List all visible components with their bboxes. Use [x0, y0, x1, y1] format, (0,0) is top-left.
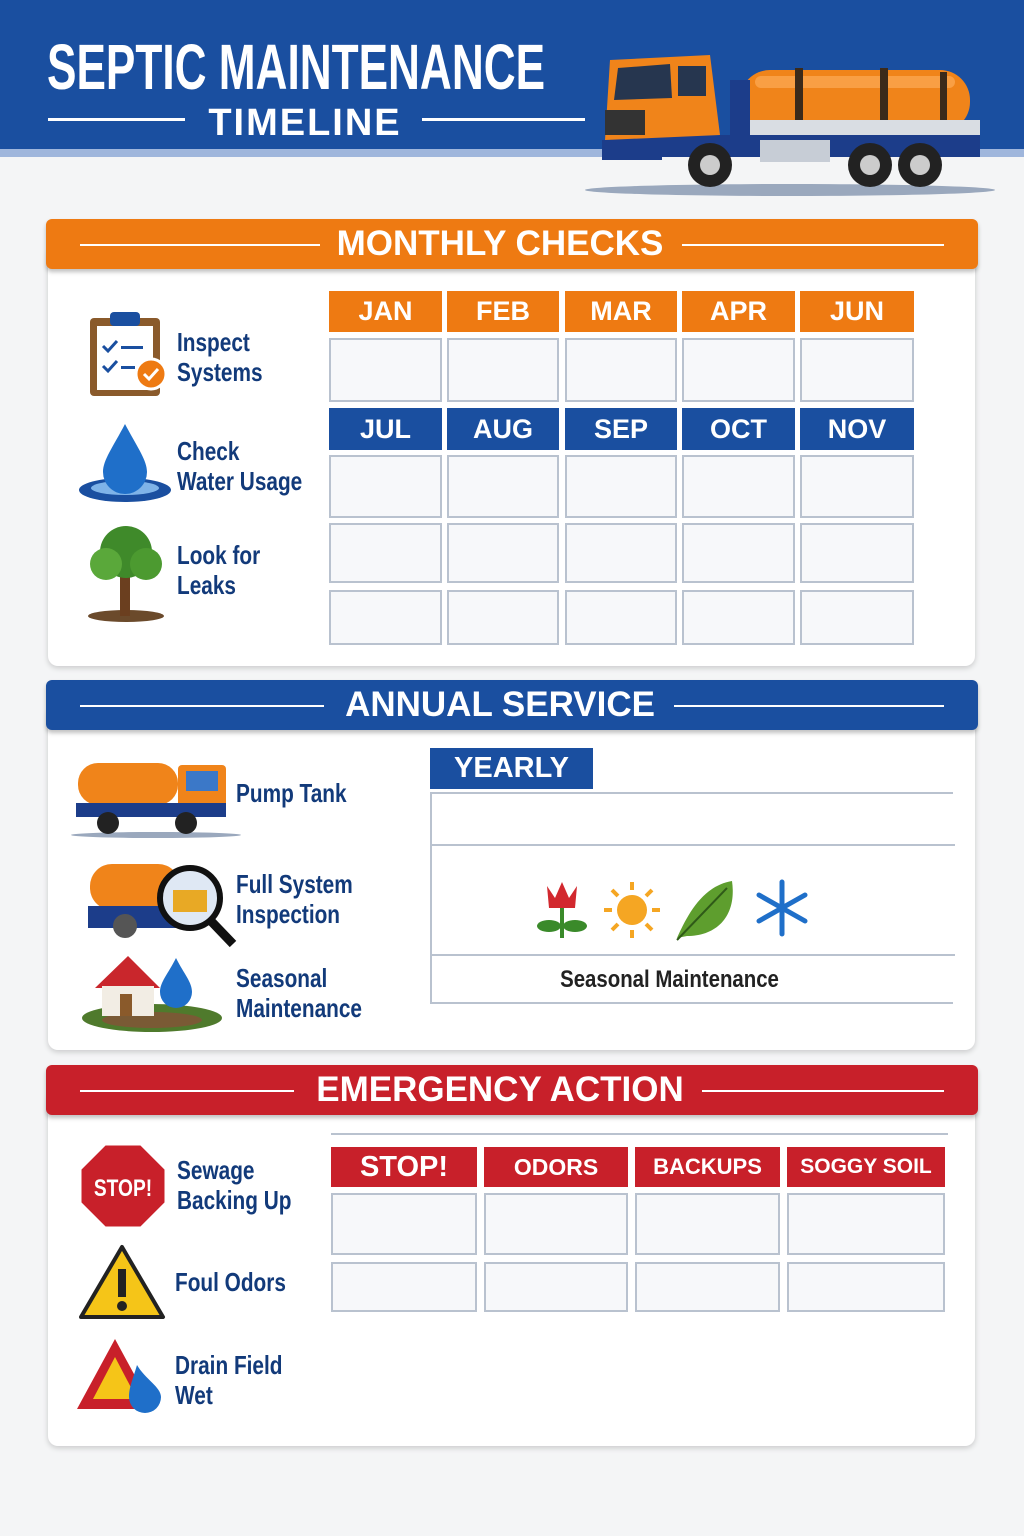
title: SEPTIC MAINTENANCE: [47, 31, 545, 103]
heading: annual service: ANNUAL SERVICE: [345, 685, 655, 724]
icon: pump truck: [71, 763, 241, 838]
title: TIMELINE: [208, 102, 402, 144]
monthly grid: JUN: [830, 296, 884, 326]
icon: water drop: [79, 424, 171, 502]
monthly grid: JUL: [360, 414, 411, 444]
icon: stop sign: STOP!: [94, 1174, 152, 1202]
icon: warning triangle: [79, 1244, 166, 1319]
heading: monthly checks: [46, 219, 978, 269]
label: seasonal maintenance: Seasonal: [236, 963, 327, 993]
icon: drain field warning: [77, 1339, 161, 1413]
label: full system inspection: Full System: [236, 869, 353, 899]
emergency grid: BACKUPS: [653, 1154, 762, 1179]
monthly grid: OCT: [710, 414, 767, 444]
icon: inspection magnifier: [88, 864, 236, 948]
label: sewage backing up: [177, 1155, 291, 1215]
monthly grid: JAN: [358, 296, 412, 326]
panel: monthly checks: [48, 245, 975, 666]
title: [47, 31, 585, 144]
label: foul odors: Foul Odors: [175, 1267, 286, 1297]
label: drain field wet: Wet: [175, 1380, 213, 1410]
monthly grid: APR: [710, 296, 767, 326]
emergency grid: STOP!: [360, 1151, 448, 1183]
yearly table: Seasonal Maintenance: [560, 966, 779, 993]
tab: yearly: [430, 748, 593, 789]
icon: tree: [88, 526, 164, 622]
monthly grid: SEP: [594, 414, 648, 444]
monthly grid: AUG: [473, 414, 533, 444]
label: drain field wet: Drain Field: [175, 1350, 282, 1380]
icon: house with drop: [82, 956, 222, 1032]
monthly grid: NOV: [828, 414, 886, 444]
emergency grid: SOGGY SOIL: [800, 1155, 932, 1178]
label: check water usage: Water Usage: [177, 466, 302, 496]
label: look for leaks: [177, 540, 260, 600]
label: look for leaks: Look for: [177, 540, 260, 570]
label: seasonal maintenance: [236, 963, 362, 1023]
yearly table: [430, 792, 953, 1004]
label: inspect systems: Inspect: [177, 327, 250, 357]
monthly grid: MAR: [590, 296, 652, 326]
label: seasonal maintenance: Maintenance: [236, 993, 362, 1023]
icon: septic truck: [585, 55, 995, 196]
tab: yearly: YEARLY: [454, 752, 569, 784]
icon: clipboard: [90, 312, 164, 396]
label: look for leaks: Leaks: [177, 570, 236, 600]
label: inspect systems: Systems: [177, 357, 263, 387]
label: check water usage: Check: [177, 436, 239, 466]
label: sewage backing up: Backing Up: [177, 1185, 291, 1215]
heading: monthly checks: MONTHLY CHECKS: [337, 224, 663, 263]
icon: stop sign: [82, 1146, 164, 1226]
monthly grid: FEB: [476, 296, 530, 326]
label: check water usage: [177, 436, 302, 496]
emergency grid: [331, 1133, 948, 1312]
monthly grid: [329, 291, 914, 645]
label: sewage backing up: Sewage: [177, 1155, 254, 1185]
icons: seasons: [537, 880, 808, 941]
label: pump tank: Pump Tank: [236, 778, 347, 808]
label: drain field wet: [175, 1350, 282, 1410]
panel: emergency action: [48, 1090, 975, 1446]
label: full system inspection: Inspection: [236, 899, 340, 929]
panel: annual service: [48, 705, 975, 1050]
heading: annual service: [46, 680, 978, 730]
heading: emergency action: EMERGENCY ACTION: [316, 1070, 684, 1109]
label: full system inspection: [236, 869, 353, 929]
heading: emergency action: [46, 1065, 978, 1115]
label: inspect systems: [177, 327, 263, 387]
header band: [0, 0, 1024, 157]
emergency grid: ODORS: [514, 1154, 598, 1180]
